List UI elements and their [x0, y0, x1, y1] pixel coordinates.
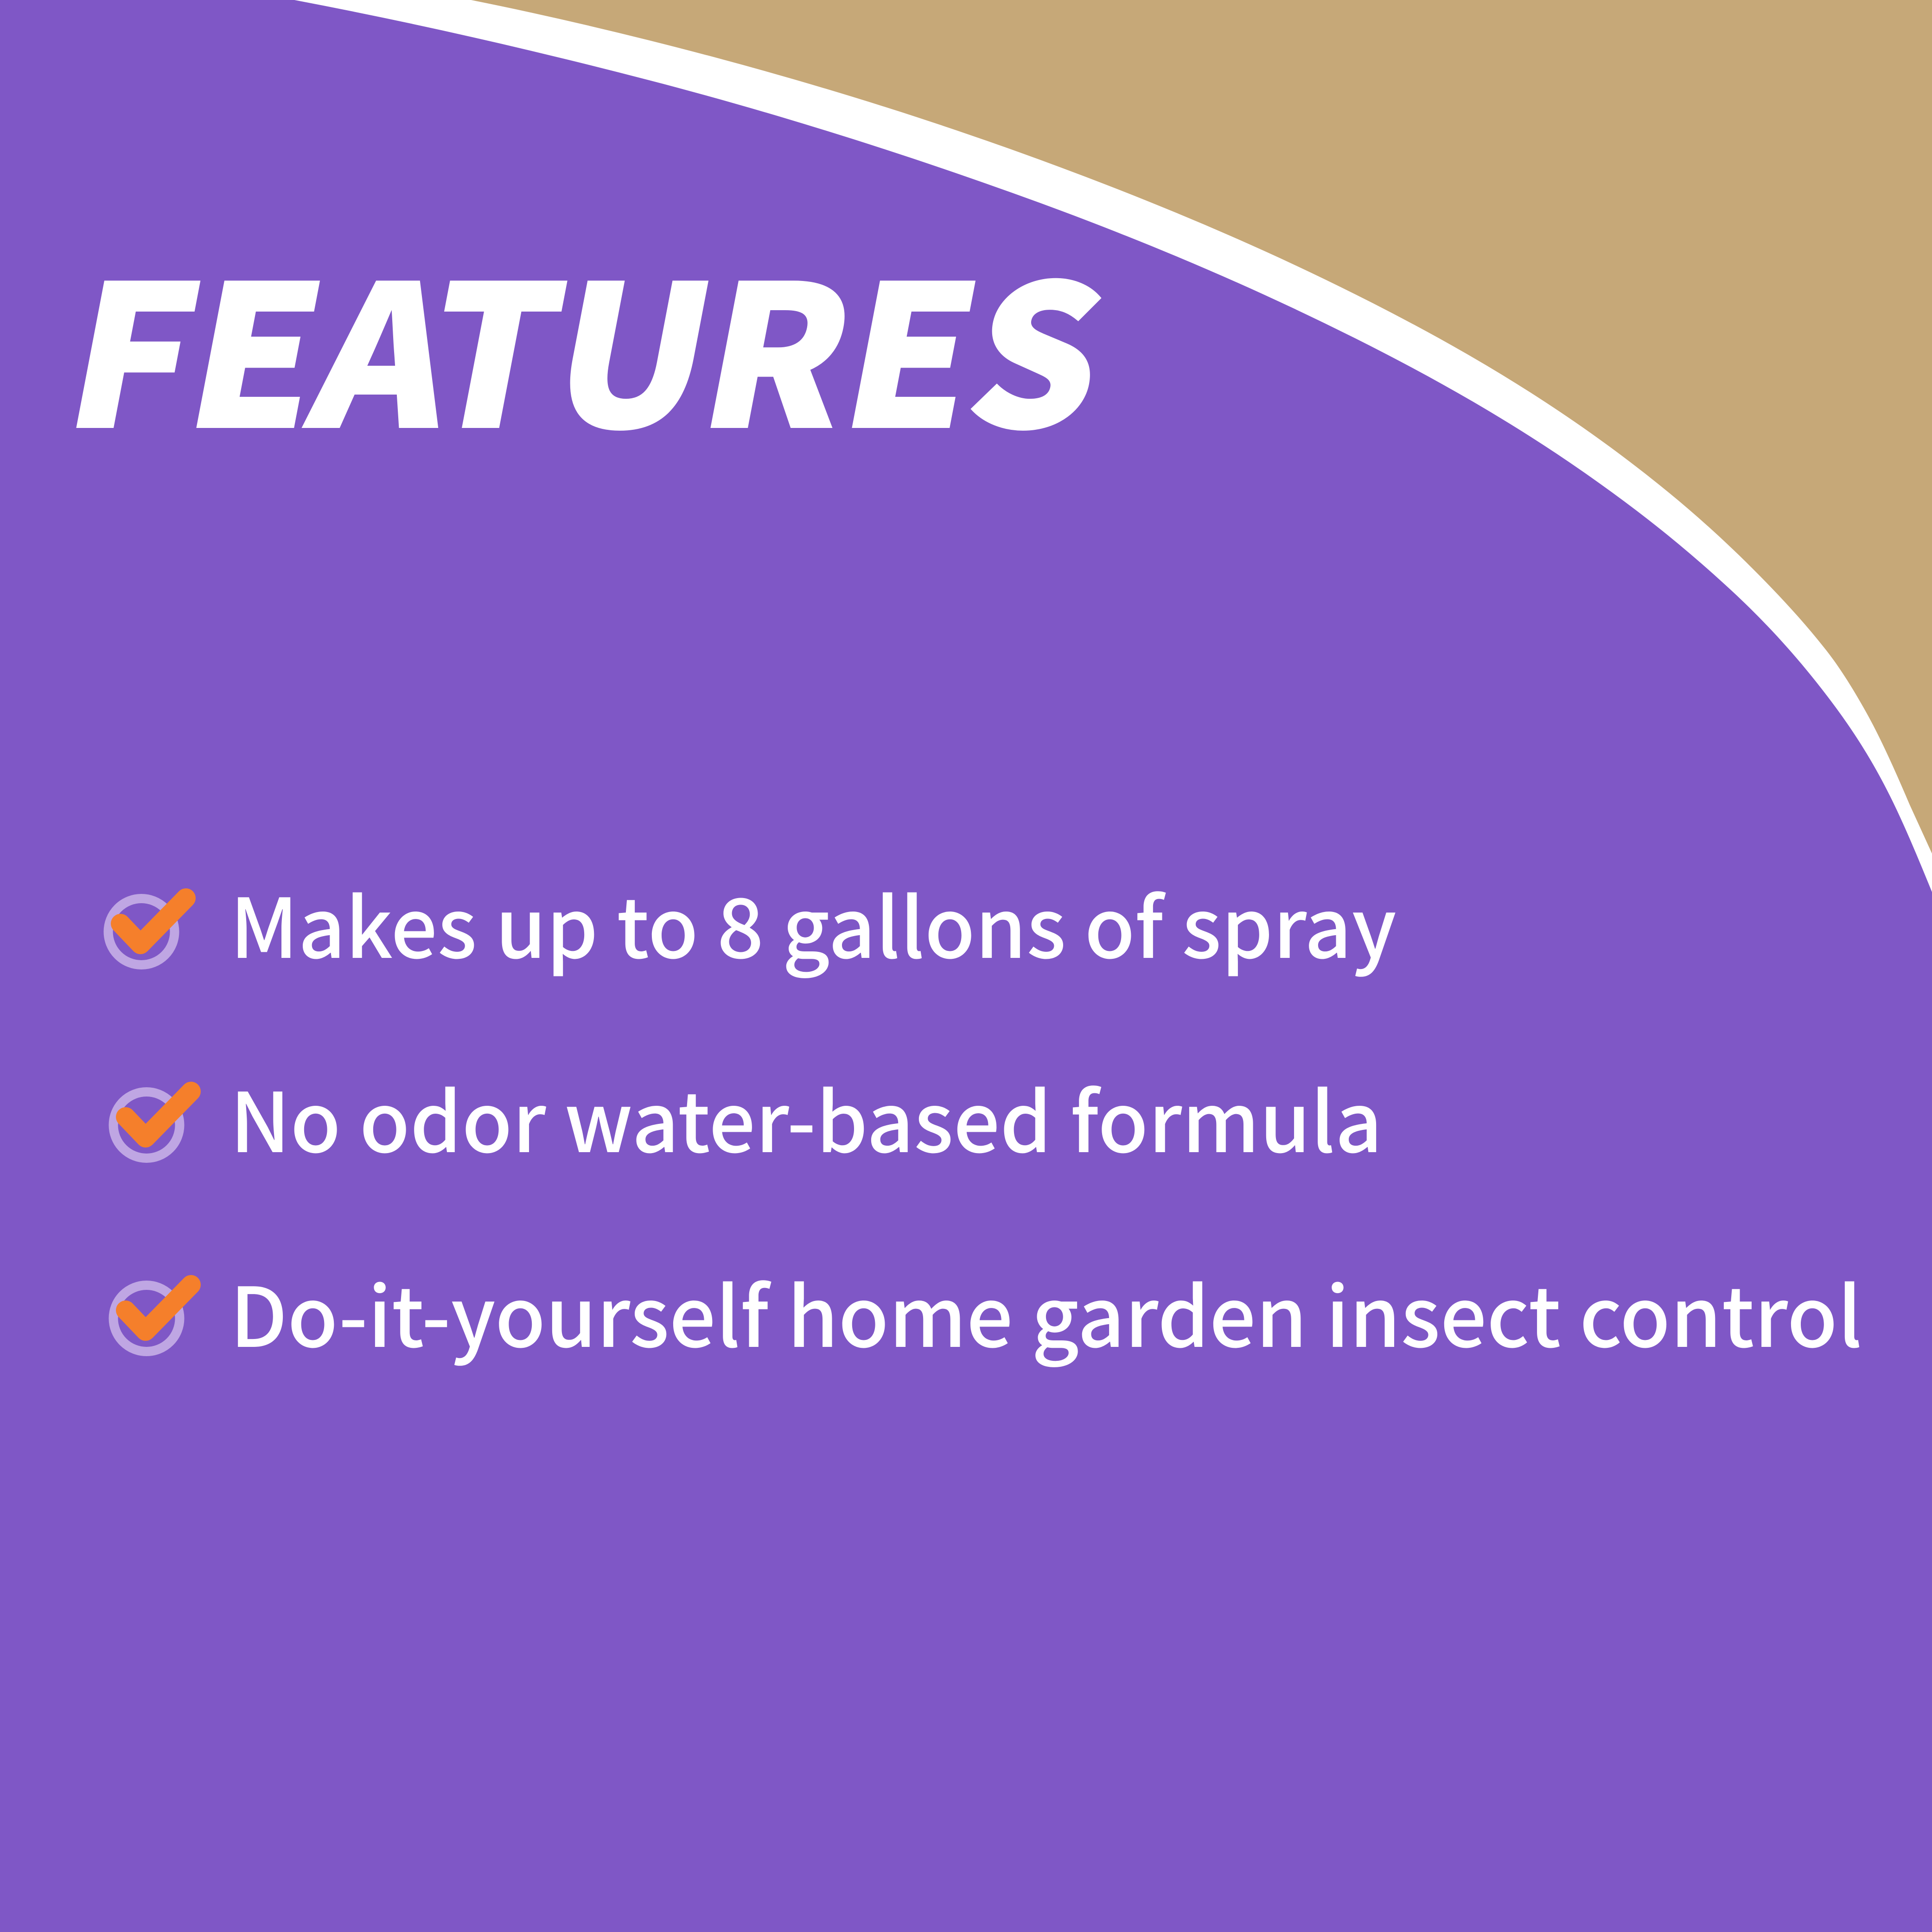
- feature row 2: [113, 1057, 1383, 1176]
- text: makes up to 8 gallons: Makes up to 8 gallons of spray: [230, 863, 1396, 982]
- title: FEATURES: FEATURES: [50, 201, 1131, 484]
- text: do-it-yourself: Do-it-yourself home garden insect control: [230, 1252, 1862, 1371]
- icon: check circle 2: [113, 1091, 191, 1158]
- icon: check circle 1: [108, 898, 186, 965]
- text: no odor formula: No odor water-based formula: [230, 1057, 1383, 1176]
- white curved band: [294, 0, 1932, 892]
- feature row 3: [113, 1252, 1862, 1371]
- tan corner shape: [471, 0, 1932, 854]
- feature row 1: [108, 863, 1396, 982]
- icon: check circle 3: [113, 1285, 191, 1352]
